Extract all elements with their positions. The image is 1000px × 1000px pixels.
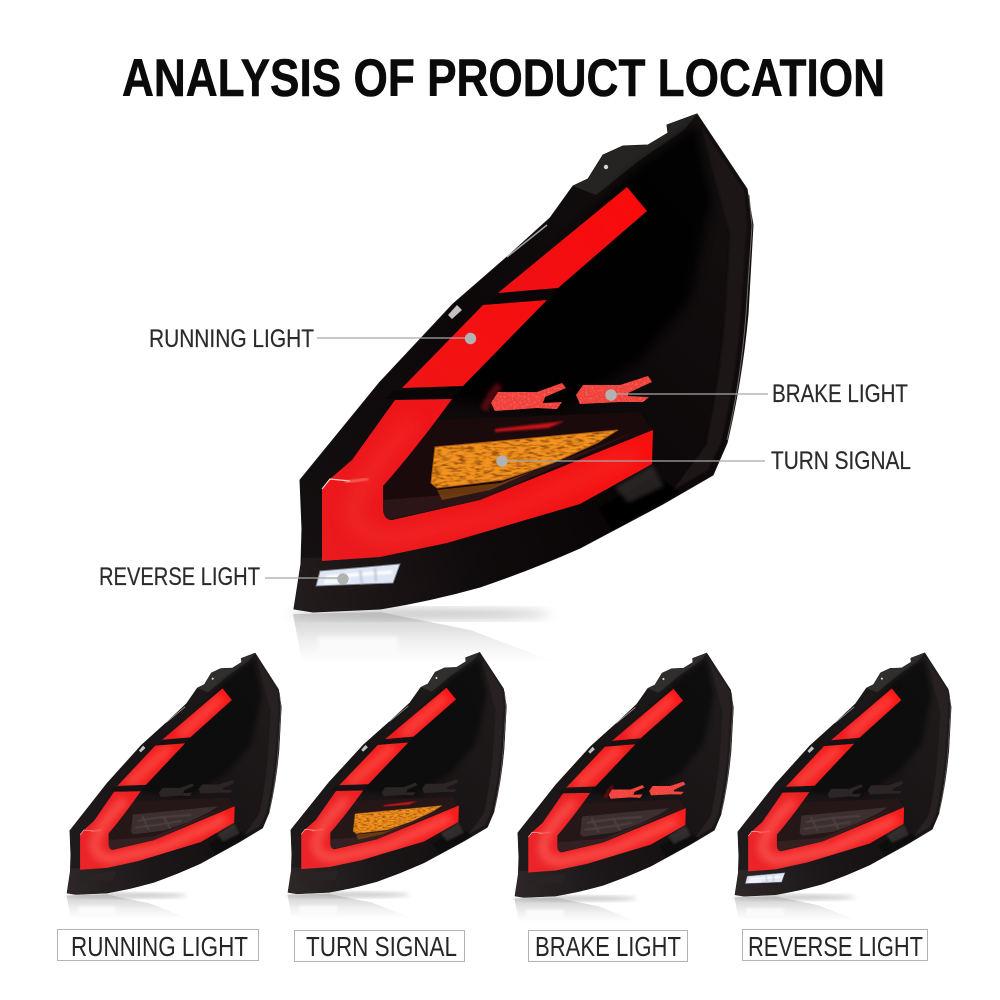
- small lamp: running light state: [65, 653, 281, 918]
- label box: reverse light: REVERSE LIGHT: [748, 931, 923, 962]
- callout: turn signal: [496, 447, 911, 475]
- label box: turn signal: TURN SIGNAL: [306, 931, 457, 962]
- small lamp: turn signal state: [286, 652, 506, 918]
- callout: running light: [149, 325, 476, 353]
- callout: turn signal: TURN SIGNAL: [771, 447, 911, 475]
- callout: brake light: [605, 380, 908, 408]
- small lamp: brake light state: [513, 653, 733, 922]
- callout: reverse light: REVERSE LIGHT: [99, 563, 260, 591]
- small lamp: reverse light state: [733, 653, 951, 920]
- label box: running light: RUNNING LIGHT: [71, 931, 248, 962]
- callout: running light: RUNNING LIGHT: [149, 325, 314, 353]
- callout: brake light: BRAKE LIGHT: [772, 380, 908, 408]
- main tail light product image: [290, 114, 753, 661]
- label box: brake light: BRAKE LIGHT: [535, 931, 681, 962]
